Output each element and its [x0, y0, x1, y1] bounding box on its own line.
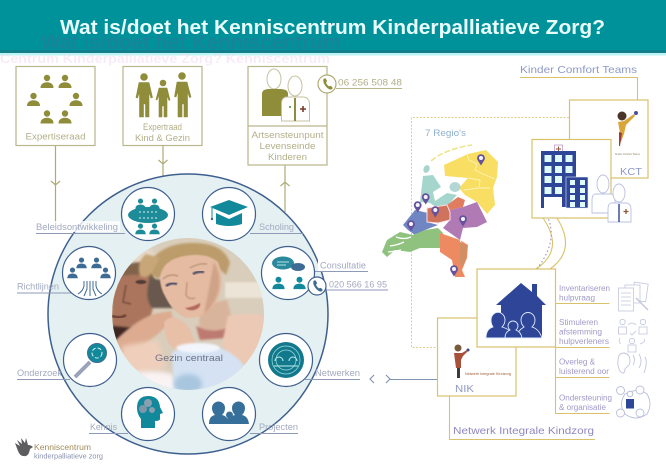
tasks list [555, 284, 612, 414]
panel: NIK: Netwerk Integrale Kindzorg [465, 372, 511, 376]
label: Beleidsontwikkeling [34, 221, 125, 234]
task: Ondersteuning & organisatie [559, 394, 612, 412]
blanket [138, 369, 174, 388]
icon: house with family [486, 283, 546, 338]
label: Expertraad Kind & Gezin: Expertraad [143, 122, 182, 132]
panel: Artsensteunpunt Levenseinde Kinderen [248, 66, 327, 165]
curved link between hospital and house [529, 212, 566, 278]
icon: family figures [136, 72, 191, 117]
connector arrows from top boxes to circle [51, 146, 290, 226]
region: east [443, 202, 487, 240]
icon: professionals connected [618, 319, 647, 352]
header banner [0, 0, 666, 66]
label: Consultatie: Consultatie [320, 260, 366, 270]
icon: six people in a circle [27, 75, 82, 124]
task: Stimuleren afstemming hulpverleners: afstemming [559, 328, 602, 336]
logo: Kenniscentrum: Kenniscentrum [34, 443, 91, 452]
task: Ondersteuning & organisatie: & organisatie [559, 403, 607, 412]
connector: Netwerken to NIK [370, 375, 437, 383]
panel: KCT: Kinder Comfort Teams [615, 153, 641, 156]
panel: KCT [570, 100, 648, 178]
task: Stimuleren afstemming hulpverleners [559, 318, 609, 346]
panel: Expertraad Kind & Gezin [123, 66, 202, 146]
region: north [444, 150, 498, 214]
title: Wat is/doet het Kenniscentrum Kinderpalliatieve Zorg? [60, 17, 605, 39]
heading: Netwerk Integrale Kindzorg [450, 396, 595, 440]
label: Richtlijnen: Richtlijnen [17, 282, 59, 292]
label: Netwerken: Netwerken [315, 368, 360, 378]
label: Expertiseraad: Expertiseraad [26, 132, 86, 142]
label: KCT: KCT [620, 166, 643, 178]
icon: Netwerken [260, 334, 312, 386]
backdrop light stripe [225, 282, 265, 298]
icon: hand [15, 438, 33, 456]
icon: ear and sound waves [618, 353, 646, 373]
icon: child with raised arm [618, 111, 638, 146]
icon: Scholing graduation cap [202, 188, 256, 240]
region: north-west [420, 175, 457, 208]
panel: house [477, 269, 556, 347]
label: Onderzoek: Onderzoek [17, 368, 63, 378]
photo: family centre [111, 238, 265, 394]
icon: hospital building [541, 145, 588, 209]
label: phone number consultatie: 020 566 16 95 [329, 280, 387, 290]
task: Overleg & luisterend oor [559, 358, 609, 376]
task: Overleg & luisterend oor: Overleg & [559, 358, 596, 366]
task: Inventariseren hulpvraag: Inventariseren [559, 284, 610, 293]
region: south-west [382, 228, 443, 257]
panel: Artsensteunpunt Levenseinde Kinderen: Kinderen [268, 152, 307, 162]
header banner: Wat is/doet het Kenniscentrum [41, 32, 341, 54]
map of the Netherlands [382, 145, 498, 277]
label: Netwerken [305, 368, 360, 380]
photo caption: Gezin centraal [155, 353, 223, 364]
heading: Kinder Comfort Teams [520, 64, 638, 100]
phone number callout [318, 75, 402, 93]
region: centre [427, 197, 465, 223]
arms and hands [116, 311, 173, 355]
task: Inventariseren hulpvraag [559, 284, 610, 302]
icon: Richtlijnen [62, 246, 116, 300]
panel: hospital [532, 140, 631, 222]
logo: Kenniscentrum [15, 438, 103, 460]
header banner: Centrum Kinderpalliatieve Zorg? Kenniscentrum [0, 51, 330, 66]
panel: Expertraad Kind & Gezin: Kind & Gezin [135, 133, 190, 143]
icon: Projecten people [202, 388, 256, 440]
man's hair and face [116, 262, 156, 284]
label: Projecten: Projecten [259, 422, 298, 432]
task: Inventariseren hulpvraag: hulpvraag [559, 294, 595, 302]
phone number callout: 06 256 508 48 [338, 78, 402, 88]
heading: Netwerk Integrale Kindzorg: Netwerk Integrale Kindzorg [453, 425, 594, 437]
neck and chest [198, 300, 232, 332]
icon: two doctors [592, 175, 631, 222]
region: west [403, 210, 438, 235]
label: Scholing [250, 222, 303, 234]
logo: Kenniscentrum: kinderpalliatieve zorg [34, 454, 103, 460]
icon: Beleidsontwikkeling [122, 188, 174, 240]
task: Stimuleren afstemming hulpverleners: hulpverleners [559, 337, 609, 346]
icon: Onderzoek magnifier [64, 334, 116, 386]
icon: location pins [407, 154, 485, 276]
label: Kennis: Kennis [90, 422, 118, 432]
woman's face [160, 255, 222, 318]
panel: Artsensteunpunt Levenseinde Kinderen: Levenseinde [260, 141, 316, 151]
label: Beleidsontwikkeling: Beleidsontwikkeling [36, 222, 118, 232]
label: Consultatie [308, 260, 368, 272]
task: Overleg & luisterend oor: luisterend oor [559, 367, 609, 376]
label lines and labels [17, 221, 388, 434]
icon: Kennis head [122, 388, 174, 440]
dotted regions frame [412, 118, 569, 348]
label: NIK: NIK [455, 383, 474, 395]
icon: documents and pen [618, 282, 648, 311]
label: Artsensteunpunt text: Artsensteunpunt [252, 130, 324, 140]
heading: Kinder Comfort Teams: Kinder Comfort Teams [520, 64, 637, 76]
task: Stimuleren afstemming hulpverleners: Stimuleren [559, 318, 598, 327]
woman's eyes and brows [166, 283, 177, 286]
woman's hair [146, 243, 230, 279]
main circle background [48, 174, 328, 454]
panel: Expertiseraad [16, 66, 95, 146]
label: Projecten [250, 422, 298, 434]
task: Ondersteuning & organisatie: Ondersteuning [559, 394, 612, 402]
icon: Consultatie [262, 246, 326, 300]
dark hair behind woman [147, 278, 174, 308]
label: Kennis [89, 422, 128, 434]
label: 7 Regio's: 7 Regio's [425, 128, 466, 139]
region: south [440, 233, 468, 277]
icon: child figure [454, 344, 470, 378]
label: Richtlijnen [17, 282, 72, 293]
icon: support and organisation [616, 386, 650, 418]
icon: parent and doctor [262, 69, 310, 121]
label: Scholing: Scholing [259, 222, 294, 232]
icon: phone consultatie [308, 277, 326, 295]
panel: NIK [438, 318, 516, 396]
